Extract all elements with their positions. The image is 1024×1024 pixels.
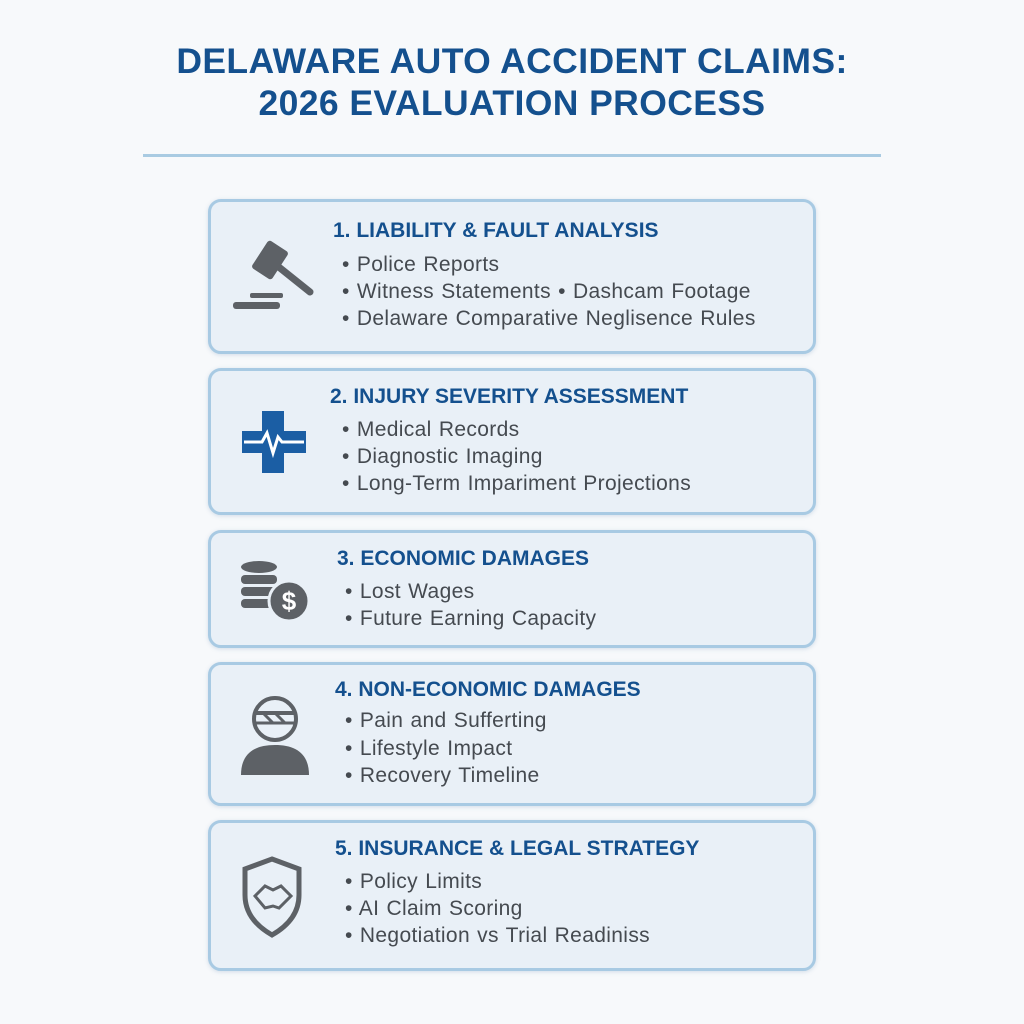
bullets: • Lifestyle Impact <box>345 736 512 760</box>
icon: coins <box>241 561 308 620</box>
title: 2026 EVALUATION PROCESS <box>258 83 765 123</box>
heading: 4. NON-ECONOMIC DAMAGES <box>335 678 641 701</box>
bullets <box>342 418 691 495</box>
bullets <box>345 870 650 947</box>
panel: economic <box>208 530 816 648</box>
bullets: • Delaware Comparative Neglisence Rules <box>342 307 756 330</box>
bullets <box>342 253 756 330</box>
title: DELAWARE AUTO ACCIDENT CLAIMS: <box>176 41 848 81</box>
bullets <box>345 580 596 630</box>
bullets: • Long-Term Impariment Projections <box>342 472 691 495</box>
panel: insurance <box>208 820 816 971</box>
panel: liability <box>208 199 816 354</box>
bullets: • AI Claim Scoring <box>345 897 523 920</box>
heading: 3. ECONOMIC DAMAGES <box>337 547 589 570</box>
bullets: • Witness Statements • Dashcam Footage <box>342 280 751 303</box>
bullets: • Negotiation vs Trial Readiniss <box>345 924 650 947</box>
icon: coins: $ <box>282 586 297 616</box>
panel: non-economic <box>208 662 816 806</box>
icon: gavel <box>233 240 314 309</box>
bullets: • Medical Records <box>342 418 520 441</box>
icon: medical cross <box>242 411 306 473</box>
bullets: • Policy Limits <box>345 870 482 893</box>
title <box>176 41 848 123</box>
icon: shield handshake <box>242 856 302 938</box>
heading: 1. LIABILITY & FAULT ANALYSIS <box>333 219 659 242</box>
icon: injured person <box>241 696 309 775</box>
panel: injury <box>208 368 816 515</box>
bullets: • Recovery Timeline <box>345 764 540 787</box>
bullets: • Pain and Sufferting <box>345 709 547 732</box>
bullets <box>345 709 547 787</box>
bullets: • Police Reports <box>342 253 499 276</box>
heading: 5. INSURANCE & LEGAL STRATEGY <box>335 837 699 860</box>
bullets: • Diagnostic Imaging <box>342 445 543 468</box>
bullets: • Lost Wages <box>345 580 474 603</box>
heading: 2. INJURY SEVERITY ASSESSMENT <box>330 385 688 408</box>
bullets: • Future Earning Capacity <box>345 607 596 630</box>
